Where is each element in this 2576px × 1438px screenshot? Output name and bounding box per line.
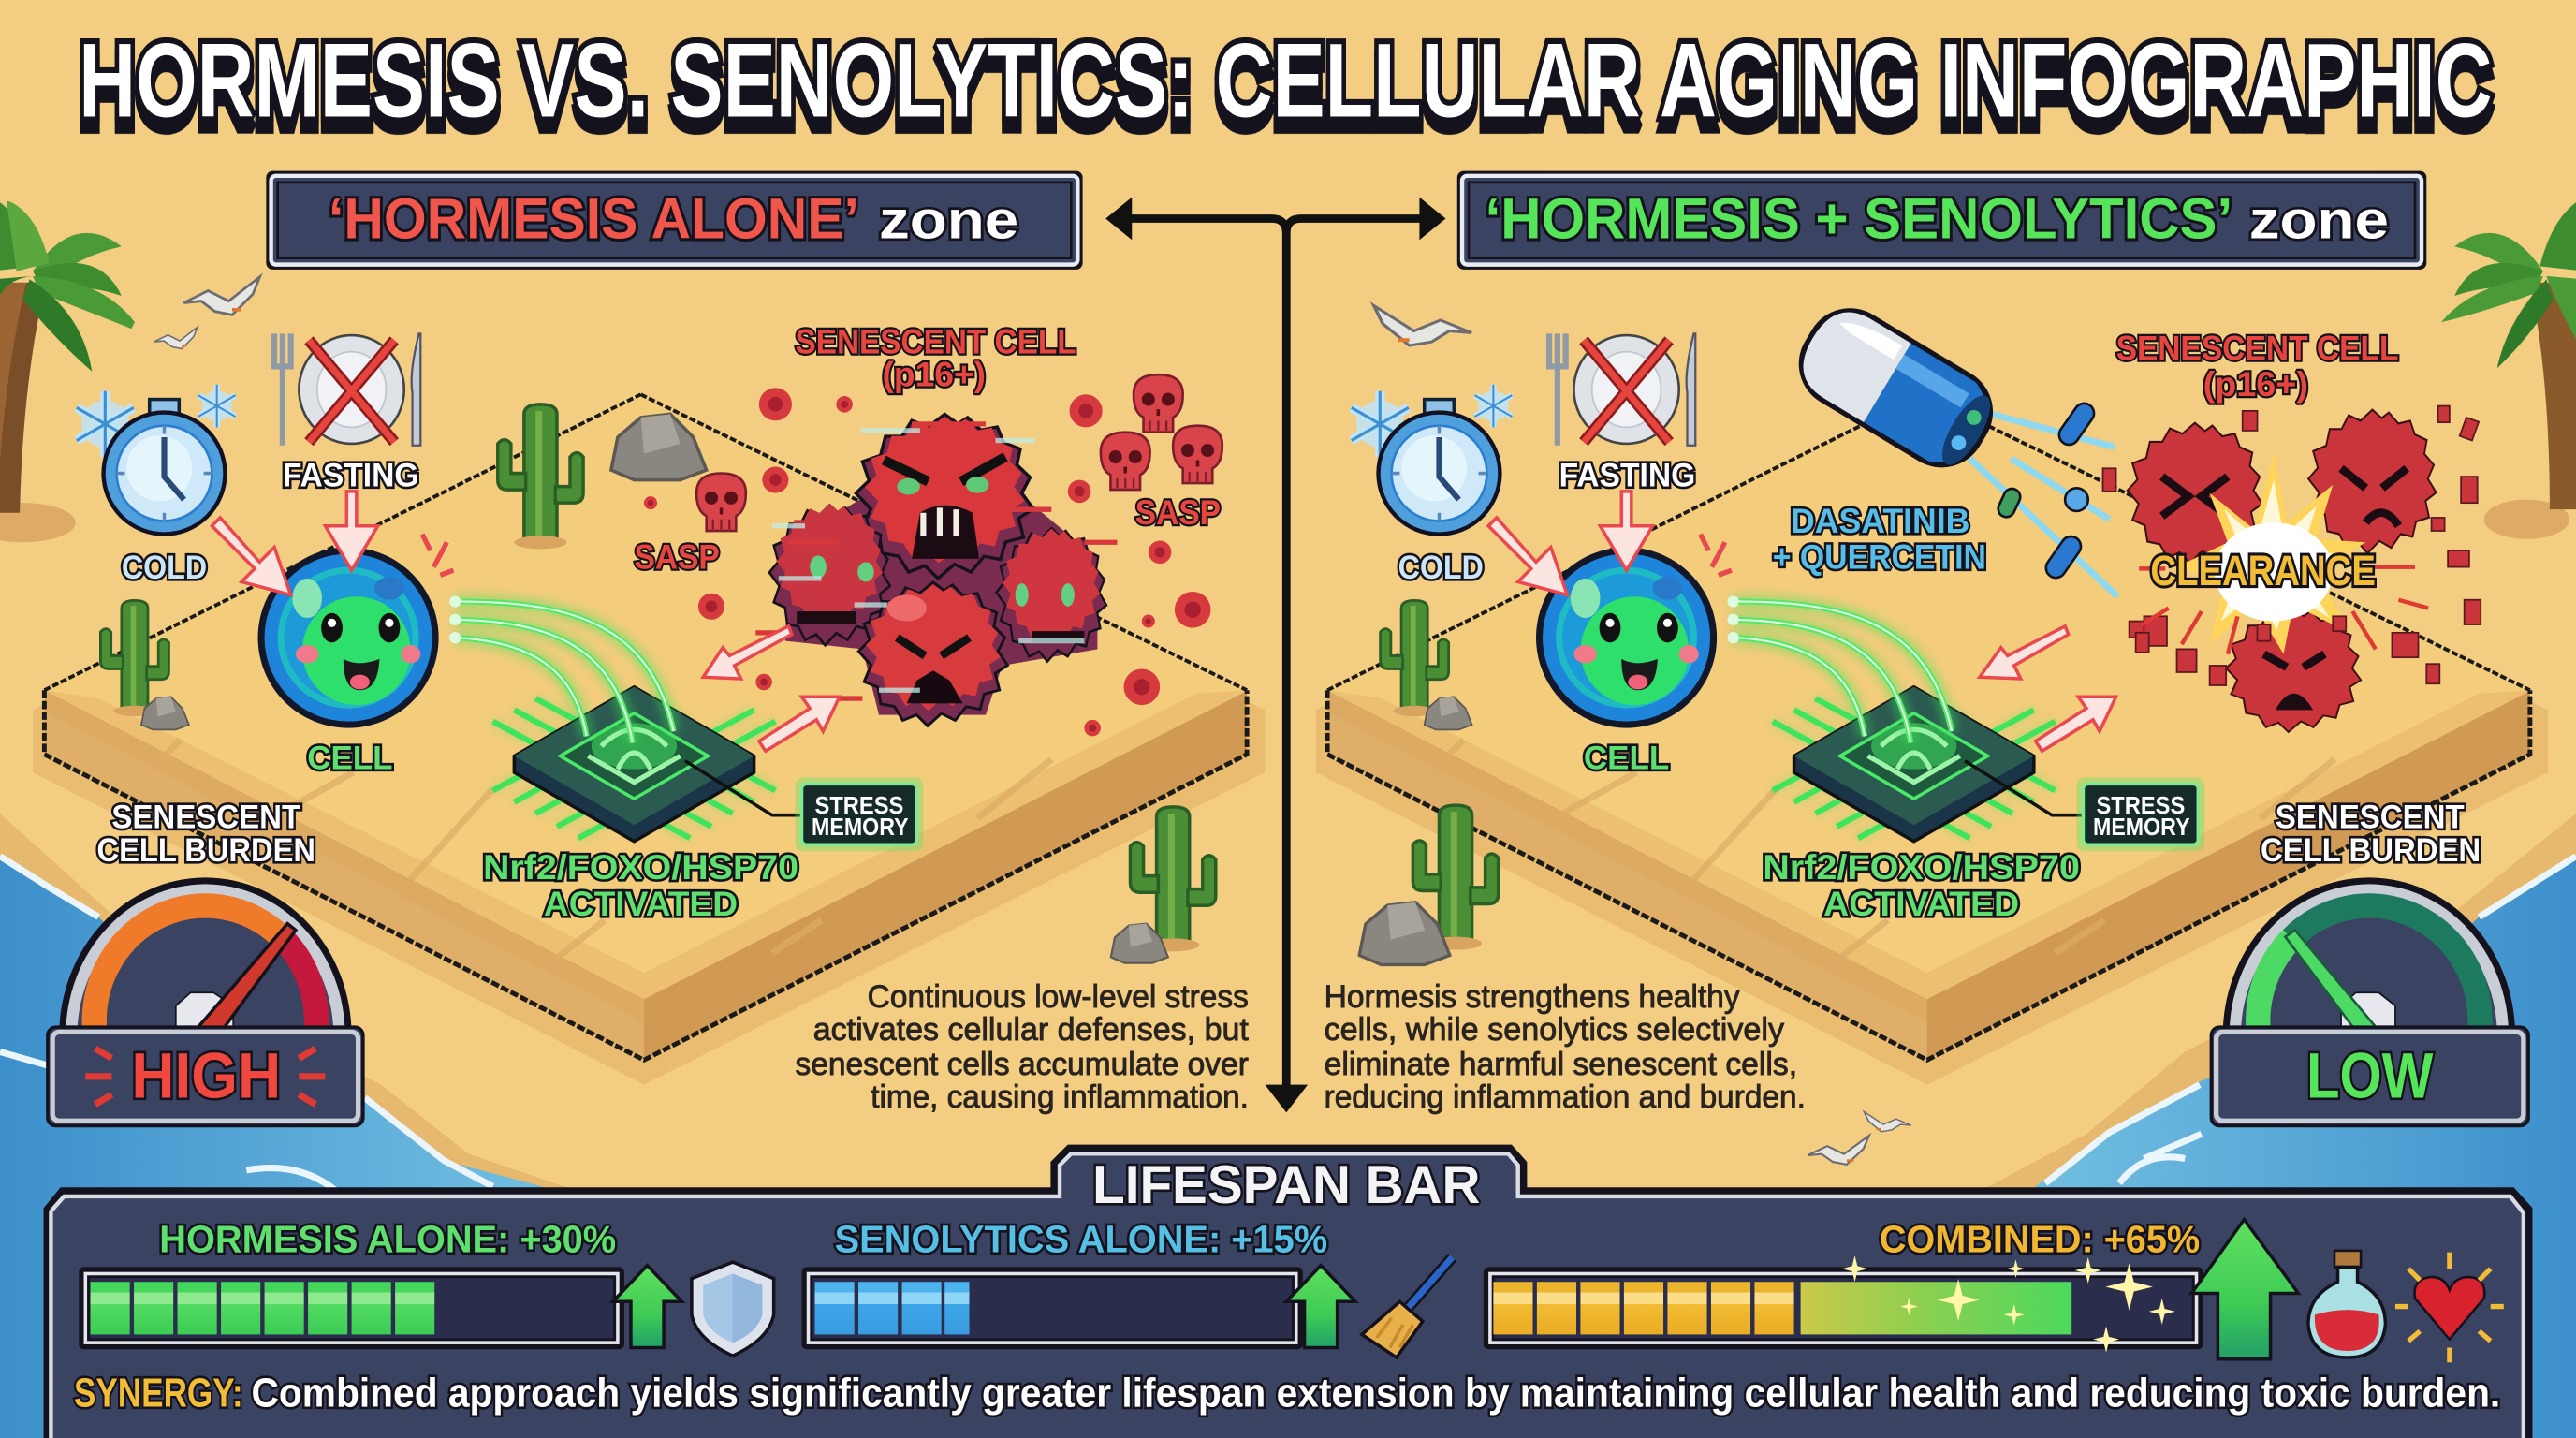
panel title: LIFESPAN BAR (1092, 1155, 1480, 1215)
arrow up small 2 (1286, 1266, 1355, 1347)
icon: shield (692, 1262, 774, 1356)
right pathway label (1763, 848, 2080, 923)
senescent cell cluster (755, 415, 1117, 726)
left chip leader line (685, 761, 805, 815)
right pathway label: Nrf2/FOXO/HSP70 (1763, 848, 2080, 887)
left chip (493, 687, 775, 842)
HIGH reading: HIGH (131, 1040, 281, 1112)
drug label: DASATINIB (1791, 502, 1969, 540)
seagulls bottom (1808, 1112, 1911, 1165)
icon: broom (1362, 1257, 1453, 1357)
right stress memory tag (2076, 777, 2204, 851)
right sand platform (1316, 394, 2548, 1085)
left burden label: CELL BURDEN (97, 832, 315, 869)
synergy statement: SYNERGY: (74, 1371, 243, 1416)
right stress memory tag: STRESS (2097, 791, 2185, 819)
body text right (1325, 979, 1806, 1115)
banner text: zone: zone (879, 191, 1018, 251)
fasting label right: FASTING (1559, 458, 1695, 494)
left gauge HIGH (48, 877, 363, 1125)
explosion burst (2177, 452, 2365, 654)
body text right: eliminate harmful senescent cells, (1325, 1047, 1797, 1082)
right cell label: CELL (1584, 741, 1669, 777)
dead cell left (2128, 423, 2262, 563)
left pathway label: Nrf2/FOXO/HSP70 (483, 848, 798, 887)
body text left: time, causing inflammation. (871, 1079, 1249, 1115)
arrow up small (613, 1266, 681, 1347)
dead cell right (2308, 410, 2437, 553)
divider arrow (1105, 198, 1445, 1112)
SASP labels left (634, 493, 1221, 576)
body text left (795, 979, 1249, 1115)
right palm tree (2441, 198, 2576, 539)
right arrows (1980, 626, 2116, 751)
left panel: fasting stressor (274, 333, 420, 494)
left SASP arrows (703, 626, 840, 751)
glitch streaks (772, 431, 1084, 690)
left pathway label (483, 848, 798, 923)
bottom cell of cluster (858, 582, 1008, 726)
right stress memory tag: MEMORY (2093, 813, 2190, 841)
right panel: fasting stressor (1549, 333, 1695, 494)
bar: combined (1484, 1255, 2203, 1353)
debris (2103, 406, 2481, 685)
dead cell bottom (2226, 609, 2361, 732)
fasting label: FASTING (283, 458, 419, 494)
left cell of cluster (769, 504, 890, 645)
banner text: zone right: zone (2249, 191, 2389, 251)
left healthy cell (258, 548, 439, 728)
right burden label (2261, 800, 2481, 869)
LOW reading: LOW (2306, 1040, 2434, 1112)
body text right: Hormesis strengthens healthy (1325, 979, 1741, 1015)
left stress memory tag: STRESS (815, 791, 903, 819)
senescent cell label right: (p16+) (2203, 365, 2308, 404)
senolytics alone label: SENOLYTICS ALONE: +15% (835, 1218, 1327, 1261)
SASP spores left (644, 388, 1211, 736)
right pathway label: ACTIVATED (1823, 885, 2019, 923)
right impact sparks (1701, 535, 1732, 575)
left panel: cold stressor (77, 385, 236, 586)
SASP labels left: SASP (634, 537, 720, 576)
cold label right: COLD (1398, 550, 1484, 586)
right healthy cell (1536, 548, 1717, 728)
right burden label: CELL BURDEN (2261, 832, 2481, 869)
banner text: red: ‘HORMESIS ALONE’ (329, 187, 859, 252)
right signalling lines (1727, 595, 1952, 742)
right chip (1773, 687, 2056, 842)
drug label (1773, 502, 1986, 576)
left cell label: CELL (307, 741, 392, 777)
icon: heart (2395, 1253, 2504, 1362)
body text left: activates cellular defenses, but (813, 1012, 1249, 1048)
cluster backing (785, 493, 1097, 715)
big arrow up (2191, 1220, 2298, 1359)
banner text: green: ‘HORMESIS + SENOLYTICS’ (1486, 187, 2232, 252)
left signalling lines (449, 595, 674, 742)
SASP labels left: SASP (1135, 493, 1221, 532)
left impact sparks (422, 535, 453, 575)
body text left: senescent cells accumulate over (795, 1047, 1249, 1082)
skulls left (696, 374, 1222, 531)
banner: hormesis alone zone (266, 171, 1083, 270)
left burden label: SENESCENT (111, 800, 301, 836)
right cell of cluster (997, 528, 1106, 662)
senescent cell label right: SENESCENT CELL (2116, 329, 2398, 367)
drug label: + QUERCETIN (1773, 537, 1986, 576)
ocean: left shore (0, 814, 578, 1438)
left pathway label: ACTIVATED (544, 885, 738, 923)
seagulls left (154, 277, 259, 349)
senescent cell label left: (p16+) (882, 356, 986, 394)
combined label: COMBINED: +65% (1880, 1218, 2200, 1261)
seagull top centre-right (1374, 306, 1471, 345)
icon: potion (2308, 1251, 2385, 1357)
senolytic beams (1969, 411, 2117, 596)
clearance label: CLEARANCE (2150, 547, 2376, 594)
senescent cell label right (2116, 329, 2398, 404)
body text right: cells, while senolytics selectively (1325, 1012, 1785, 1048)
banner: hormesis + senolytics zone (1457, 171, 2426, 270)
left burden label (97, 800, 315, 869)
large senolytic capsule (1782, 292, 2010, 484)
exploded senescent cells (2103, 406, 2481, 732)
lifespan bar panel (48, 1149, 2528, 1438)
left sand platform (33, 394, 1265, 1085)
right chip leader line (1965, 761, 2085, 815)
right gauge LOW (2211, 877, 2528, 1125)
left cacti and rocks (100, 404, 1216, 963)
small pills (1996, 400, 2098, 581)
senescent cell label left: SENESCENT CELL (795, 322, 1076, 360)
left stress memory tag: MEMORY (812, 813, 909, 841)
right panel: cold stressor (1352, 385, 1512, 586)
body text left: Continuous low-level stress (868, 979, 1249, 1015)
left palm tree (0, 198, 135, 542)
right stress arrows (1488, 492, 1653, 594)
left stress memory tag (795, 777, 923, 851)
ocean: right shore (1980, 814, 2576, 1438)
right burden label: SENESCENT (2276, 800, 2465, 836)
bar: hormesis alone (79, 1267, 624, 1349)
senescent cell label left (795, 322, 1076, 394)
hormesis alone label: HORMESIS ALONE: +30% (159, 1218, 616, 1261)
right cacti and rocks (1359, 600, 1499, 964)
main angry cell (856, 415, 1033, 579)
left stress arrows (212, 492, 378, 594)
body text right: reducing inflammation and burden. (1325, 1079, 1806, 1115)
cold label: COLD (122, 550, 207, 586)
bar: senolytics alone (801, 1267, 1303, 1349)
